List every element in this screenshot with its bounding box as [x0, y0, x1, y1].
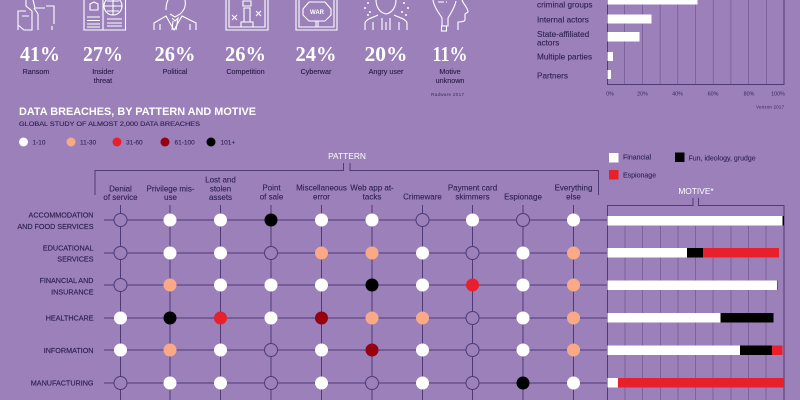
column labels: Lost and	[205, 176, 236, 184]
stat: insider threat: Insider	[92, 67, 114, 76]
icon: political	[154, 0, 196, 30]
column labels: Privilege mis-	[146, 184, 195, 194]
axis labels: 100%	[771, 92, 785, 98]
chart axes	[608, 0, 784, 84]
legend: motive: Financial	[623, 154, 651, 162]
column labels: skimmers	[455, 192, 490, 202]
axis labels: 60%	[708, 92, 719, 98]
bars	[608, 0, 698, 79]
stat: motive unknown: 11%	[432, 42, 468, 66]
column labels	[103, 176, 592, 202]
axis labels: 0%	[606, 92, 614, 98]
row labels: FINANCIAL AND	[39, 276, 94, 285]
icon: insider threat	[84, 0, 126, 30]
bar: financial	[608, 280, 778, 290]
column labels: use	[164, 193, 177, 202]
bar labels: Internal actors	[537, 16, 589, 24]
legend: motive: Fun, ideology, grudge	[688, 156, 756, 162]
bar labels: State-affiliated	[537, 30, 590, 39]
axis labels	[606, 92, 785, 98]
legend: dot scale: 1-10	[32, 140, 46, 146]
bar labels: criminal groups	[537, 0, 593, 10]
chart: threat actors	[537, 0, 785, 110]
row: financial	[114, 278, 580, 292]
legend: dot scale: 61-100	[174, 140, 195, 146]
row labels: MANUFACTURING	[31, 378, 94, 388]
heading: motive: MOTIVE*	[678, 186, 714, 196]
row: educational	[114, 246, 580, 260]
column labels: assets	[209, 193, 232, 202]
bar labels: Partners	[537, 72, 568, 80]
column labels: of service	[103, 193, 138, 202]
icon: motive unknown	[433, 0, 468, 31]
icon: cyberwar	[296, 0, 337, 30]
stat: ransom	[20, 42, 60, 76]
legend: motive: Espionage	[623, 172, 656, 180]
stat: angry user	[364, 42, 408, 76]
matrix grid lines	[104, 205, 607, 400]
row: healthcare	[114, 312, 580, 324]
title: DATA BREACHES, BY PATTERN AND MOTIVE	[19, 106, 256, 118]
column labels: else	[566, 192, 581, 202]
column labels: Miscellaneous	[296, 184, 347, 192]
row labels: AND FOOD SERVICES	[17, 222, 94, 231]
row labels: INSURANCE	[51, 288, 94, 296]
icon: competition	[226, 0, 268, 30]
column labels: tacks	[363, 192, 381, 202]
stat: competition	[225, 42, 266, 76]
stat: angry user: 20%	[364, 42, 408, 66]
stat: political: 26%	[154, 42, 196, 66]
row labels: ACCOMMODATION	[29, 210, 94, 220]
stat: political: Political	[163, 67, 188, 76]
legend: dot scale: 11-30	[80, 140, 97, 146]
row labels: HEALTHCARE	[46, 314, 94, 322]
icon: cyberwar: WAR	[310, 10, 325, 16]
source: Verizon: Verizon 2017	[756, 104, 784, 110]
column labels: Payment card	[448, 184, 497, 192]
panel: attack motives	[18, 0, 468, 97]
row labels: INFORMATION	[44, 346, 94, 355]
bar: accommodation	[608, 216, 784, 226]
legend: dot scale: 31-60	[126, 140, 143, 146]
grid lines	[625, 0, 766, 84]
row: accommodation	[114, 214, 580, 226]
bar labels	[537, 0, 593, 80]
stat: political	[154, 42, 196, 76]
stat: ransom: 41%	[20, 42, 60, 66]
row labels: EDUCATIONAL	[43, 244, 94, 252]
legend: motive	[609, 152, 756, 180]
column labels: Denial	[109, 184, 132, 194]
stat: cyberwar: Cyberwar	[301, 67, 332, 76]
legend: dot scale	[19, 138, 235, 146]
column labels: Point	[262, 184, 281, 192]
matrix dots	[114, 214, 580, 390]
stat: motive unknown: unknown	[436, 76, 464, 85]
bar: manufacturing	[608, 378, 784, 388]
bar: educational	[608, 248, 779, 258]
axis labels: 80%	[744, 92, 755, 98]
row labels	[17, 210, 94, 388]
row labels: SERVICES	[57, 254, 94, 264]
heading: pattern: PATTERN	[328, 151, 366, 161]
pattern bracket	[95, 163, 598, 195]
column labels: Everything	[555, 184, 592, 192]
motive chart	[608, 216, 784, 400]
motive grid lines	[625, 226, 766, 400]
stat: angry user: Angry user	[369, 67, 404, 76]
row: manufacturing	[114, 376, 580, 390]
bar labels: actors	[537, 38, 559, 48]
column labels: error	[313, 192, 330, 202]
stat: insider threat: threat	[94, 76, 112, 85]
source: Radware: Radware 2017	[431, 92, 464, 97]
motive bracket	[608, 198, 784, 400]
stat: motive unknown: Motive	[439, 67, 461, 76]
axis labels: 20%	[637, 92, 648, 98]
stat: cyberwar	[296, 42, 336, 76]
column labels: Web app at-	[350, 184, 394, 192]
subtitle: GLOBAL STUDY OF ALMOST 2,000 DATA BREACHES	[19, 121, 200, 128]
column labels: stolen	[210, 184, 231, 194]
stat: ransom: Ransom	[23, 67, 49, 76]
bar: healthcare	[608, 313, 774, 322]
stat: competition: 26%	[225, 42, 266, 66]
stat: insider threat: 27%	[83, 42, 123, 66]
column labels: of sale	[260, 192, 284, 202]
icon: angry user	[364, 0, 409, 30]
stat: competition: Competition	[226, 67, 265, 76]
axis labels: 40%	[672, 92, 683, 98]
stat: cyberwar: 24%	[296, 42, 336, 66]
icon: ransom	[18, 0, 54, 30]
column labels: Crimeware	[403, 192, 442, 202]
legend: dot scale: 101+	[220, 140, 235, 146]
stat: motive unknown	[432, 42, 468, 85]
bar: information	[608, 346, 782, 355]
bar labels: Multiple parties	[537, 52, 592, 62]
column labels: Espionage	[504, 192, 542, 202]
stat: insider threat	[83, 42, 123, 85]
row: information	[114, 344, 580, 356]
